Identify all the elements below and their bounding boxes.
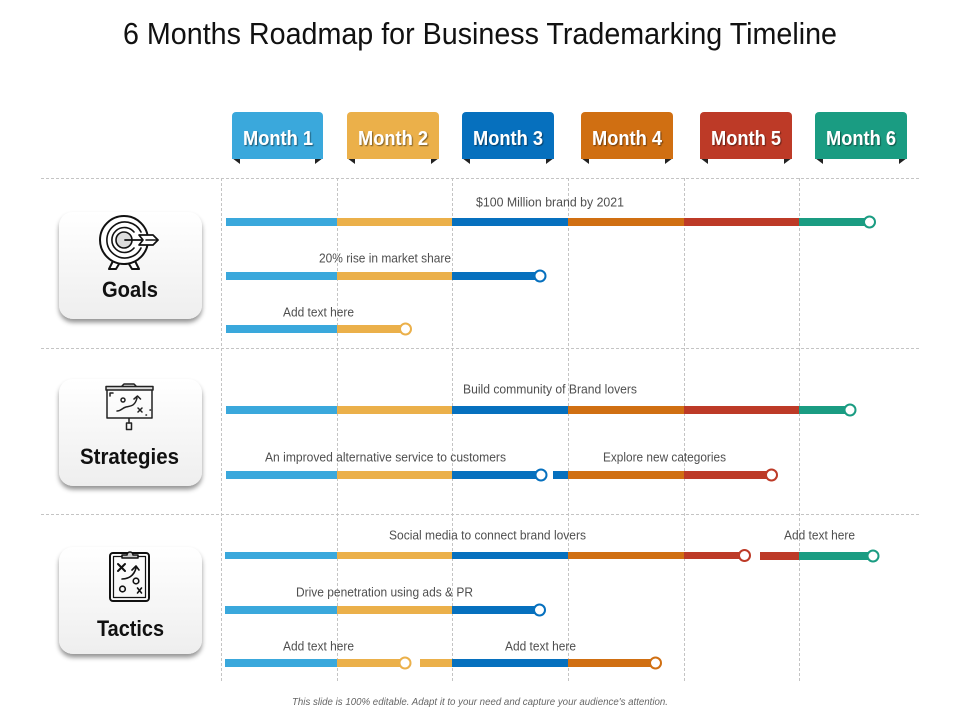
timeline: $100 Million brand — [226, 194, 875, 228]
month 1 tab: Month 1 — [243, 127, 313, 150]
month 2 tab: Month 2 — [358, 127, 428, 150]
timeline: build community — [226, 382, 856, 416]
timeline: explore new categories: Explore new categories — [603, 450, 726, 464]
month 6 tab: Month 6 — [826, 127, 896, 150]
timeline: 20% rise: 20% rise in market share — [319, 250, 451, 266]
label: tactics: Tactics — [97, 616, 164, 641]
icon: target — [100, 216, 158, 269]
month headers — [232, 112, 907, 164]
timeline: tactics add text month 6: Add text here — [784, 528, 855, 542]
timeline: drive penetration — [225, 584, 545, 616]
month 1 tab — [232, 112, 323, 164]
month 4 tab — [581, 112, 673, 164]
title: 6 Months Roadmap for Business Trademarking Timeline — [123, 16, 837, 51]
timeline: 20% rise — [226, 250, 546, 282]
label: goals: Goals — [102, 277, 158, 302]
timeline: tactics add text month 6 — [760, 528, 878, 562]
timeline: social media: Social media to connect brand lovers — [389, 528, 586, 542]
month 3 tab: Month 3 — [473, 127, 543, 150]
timeline: tactics add text month 2 — [225, 638, 410, 668]
panel: strategies — [59, 379, 202, 486]
panel: goals — [59, 212, 202, 319]
month 4 tab: Month 4 — [592, 127, 663, 150]
timeline: tactics add text month 3: Add text here — [505, 638, 576, 654]
timeline: tactics add text month 2: Add text here — [283, 638, 354, 654]
month 5 tab — [700, 112, 792, 164]
timeline: explore new categories — [553, 450, 777, 480]
panel: tactics — [59, 547, 202, 654]
timeline: drive penetration: Drive penetration using ads & PR — [296, 584, 473, 600]
timeline: goals add text — [226, 304, 411, 334]
month 6 tab — [815, 112, 907, 164]
icon: clipboard — [110, 552, 149, 601]
timeline: improved alternative — [226, 450, 546, 480]
timeline: goals add text: Add text here — [283, 304, 354, 320]
timeline: improved alternative: An improved alternative service to customers — [265, 450, 506, 464]
grid lines — [41, 178, 919, 682]
month 5 tab: Month 5 — [711, 127, 781, 150]
timeline: $100 Million brand: $100 Million brand by 2021 — [476, 194, 624, 210]
month 2 tab — [347, 112, 439, 164]
month 3 tab — [462, 112, 554, 164]
timeline: build community: Build community of Brand lovers — [463, 382, 637, 396]
timeline: tactics add text month 3 — [420, 638, 661, 668]
icon: presentation board — [106, 384, 153, 430]
label: strategies: Strategies — [80, 444, 179, 469]
footer note: This slide is 100% editable. Adapt it to your need and capture your audience's attention. — [292, 697, 668, 708]
timeline: social media — [225, 528, 750, 561]
